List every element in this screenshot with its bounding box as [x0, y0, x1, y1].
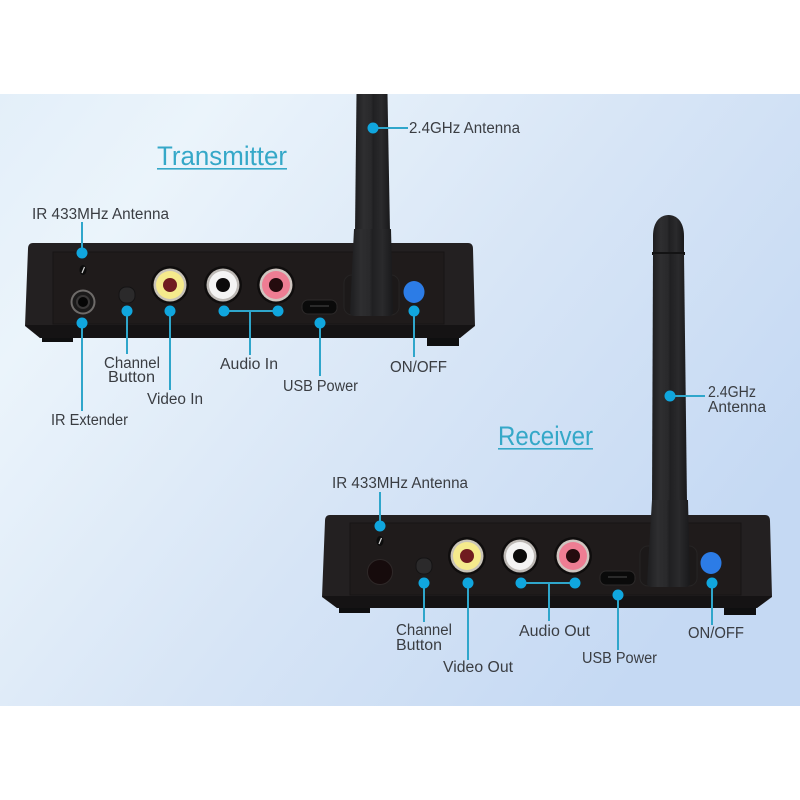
callout: transmitter 2.4GHz Antenna: 2.4GHz Antenna: [409, 120, 520, 137]
callout: transmitter IR 433MHz Antenna: [32, 206, 169, 258]
background panel: [0, 94, 800, 706]
callout: receiver Channel Button: Button: [396, 637, 442, 654]
blue power button: [404, 281, 424, 303]
callout: transmitter USB Power: USB Power: [283, 378, 358, 395]
IR window: [368, 560, 392, 584]
blue power button: [700, 552, 722, 574]
callout: Video Out: [443, 578, 514, 676]
transmitter antenna: [344, 94, 399, 316]
title: Receiver: Receiver: [498, 421, 593, 451]
channel button: [416, 558, 432, 574]
callout: IR Extender: [51, 318, 128, 429]
yellow RCA jack: [151, 266, 189, 304]
callout: transmitter USB Power: [283, 318, 358, 395]
callout: transmitter Channel Button: Channel: [104, 355, 160, 372]
callout: transmitter IR 433MHz Antenna: IR 433MHz Antenna: [32, 206, 169, 223]
IR antenna slot: [80, 265, 86, 275]
callout: receiver Channel Button: Channel: [396, 622, 452, 639]
white RCA jack: [204, 266, 242, 304]
callout: transmitter ON/OFF: [390, 306, 447, 376]
callout: receiver ON/OFF: ON/OFF: [688, 625, 744, 642]
callout: receiver IR 433MHz Antenna: IR 433MHz Antenna: [332, 475, 468, 492]
callout: receiver IR 433MHz Antenna: [332, 475, 468, 532]
white RCA jack: [501, 537, 539, 575]
IR antenna slot: [376, 536, 384, 546]
device: transmitter box: [25, 243, 475, 346]
callout: transmitter ON/OFF: ON/OFF: [390, 359, 447, 376]
receiver antenna: [640, 215, 697, 587]
device: receiver box: [322, 515, 772, 615]
red RCA jack: [554, 537, 592, 575]
callout: transmitter Channel Button: [104, 306, 160, 386]
callout: Video Out: Video Out: [443, 659, 514, 676]
callout: receiver 2.4GHz Antenna: Antenna: [708, 399, 766, 416]
callout: Audio Out: [516, 578, 591, 640]
callout: receiver USB Power: [582, 590, 657, 667]
callout: receiver 2.4GHz Antenna: [664, 384, 766, 416]
callout: Audio In: [218, 306, 284, 373]
channel button: [119, 287, 135, 303]
callout: receiver Channel Button: [396, 578, 452, 654]
red RCA jack: [257, 266, 295, 304]
yellow RCA jack: [448, 537, 486, 575]
IR extender jack: [70, 290, 96, 314]
callout: Audio In: Audio In: [220, 356, 278, 373]
USB port: [302, 300, 337, 314]
callout: IR Extender: IR Extender: [51, 412, 128, 429]
callout: Video In: Video In: [147, 391, 203, 408]
callout: receiver USB Power: USB Power: [582, 650, 657, 667]
callout: receiver 2.4GHz Antenna: 2.4GHz: [708, 384, 756, 401]
title: Transmitter: Transmitter: [157, 141, 287, 171]
callout: receiver ON/OFF: [688, 578, 744, 642]
callout: Audio Out: Audio Out: [519, 623, 591, 640]
callout: Video In: [147, 306, 203, 408]
callout: transmitter Channel Button: Button: [108, 369, 155, 386]
USB port: [600, 571, 635, 585]
